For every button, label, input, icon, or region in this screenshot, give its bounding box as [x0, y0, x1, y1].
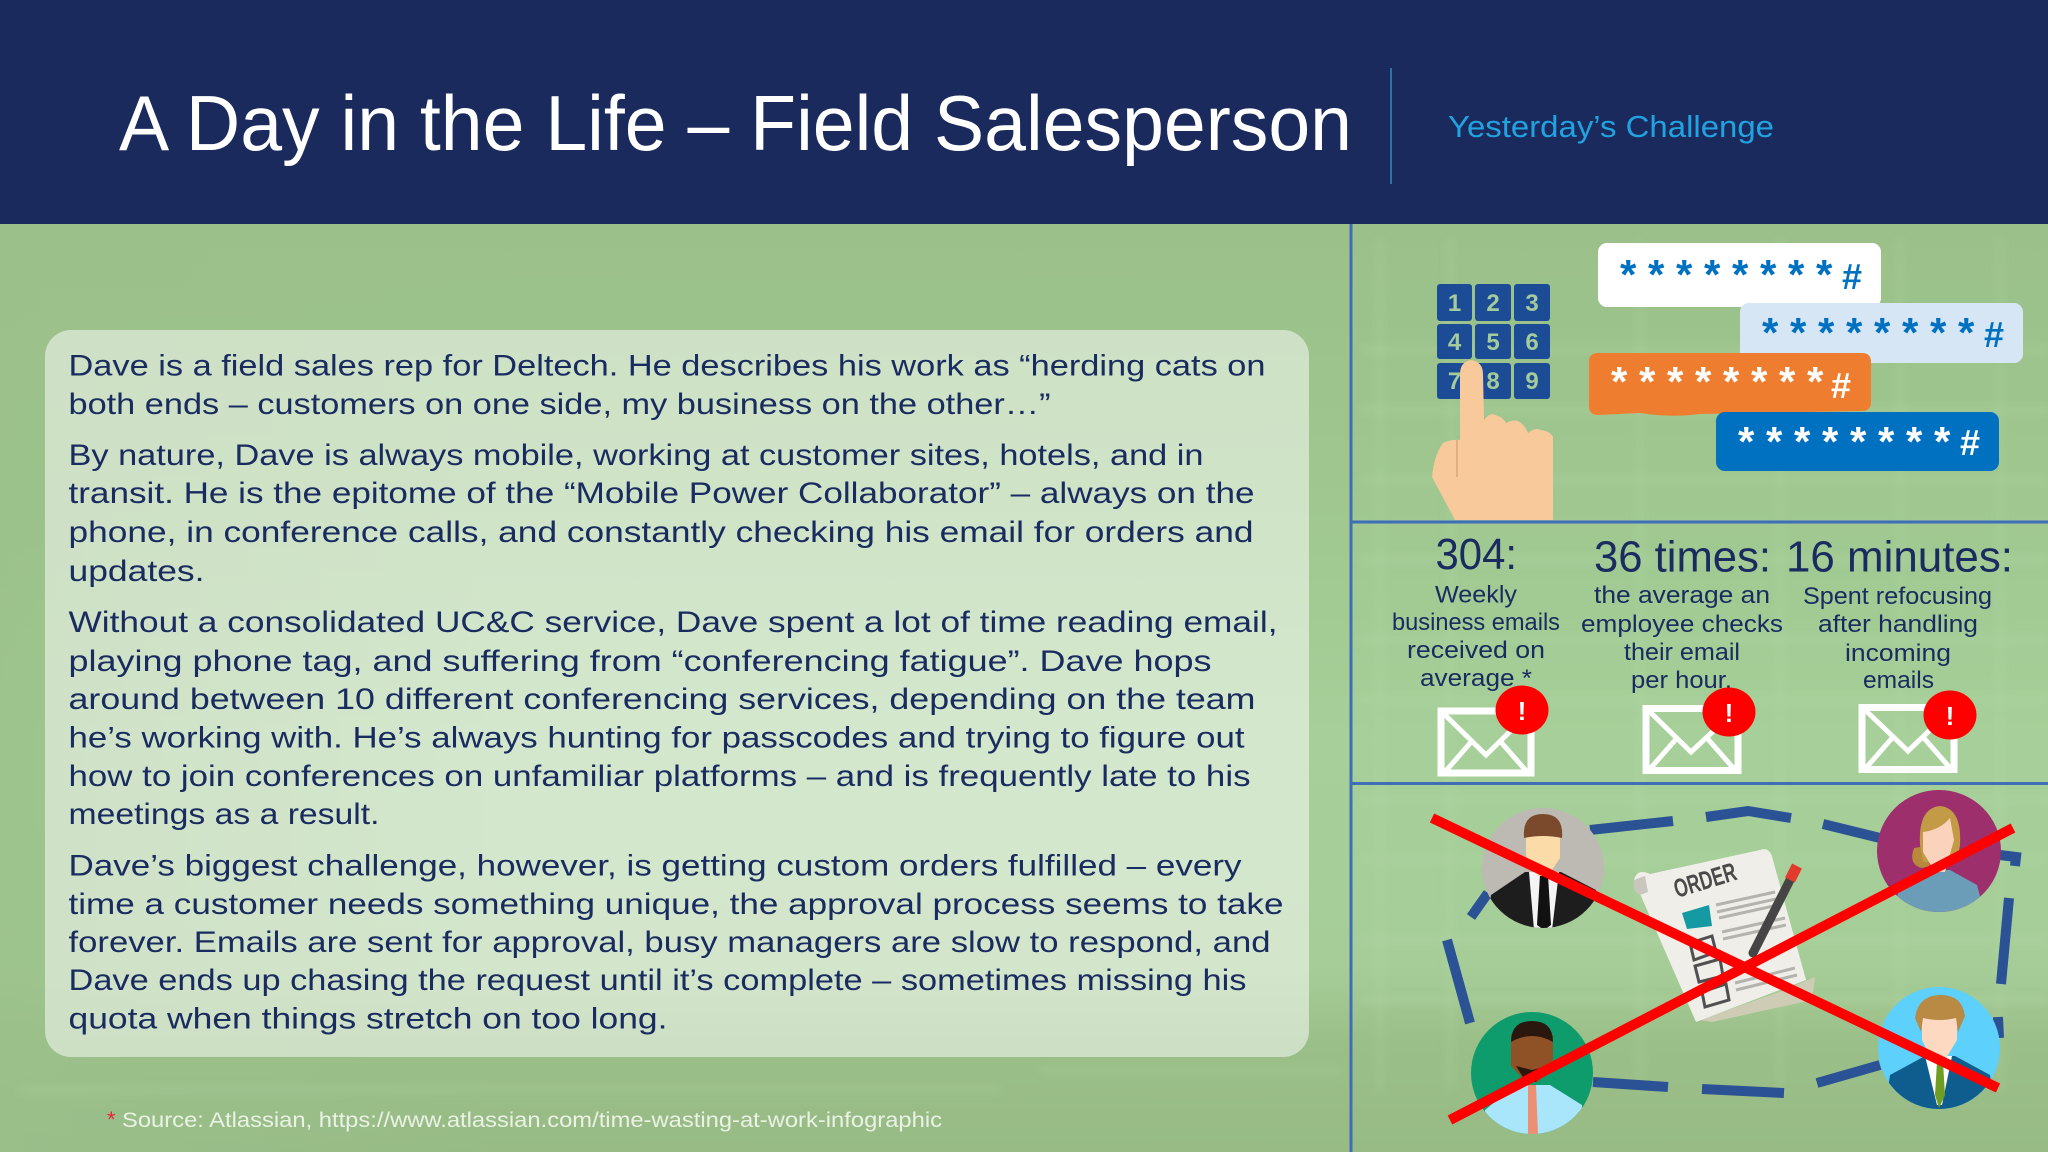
paragraph 4	[68, 850, 1284, 1036]
icon: envelope alert 3	[1862, 690, 1976, 770]
icon: envelope alert 1	[1441, 686, 1548, 773]
icon: envelope alert 2	[1646, 688, 1756, 770]
stat: 304 weekly emails: average *	[1420, 665, 1532, 692]
stat: 304 weekly emails	[1392, 530, 1560, 692]
title: A Day in the Life – Field Salesperson	[119, 79, 1352, 167]
paragraph 3: playing phone tag, and suffering from “conferencing fatigue”. Dave hops	[68, 645, 1212, 678]
paragraph 4: Dave’s biggest challenge, however, is getting custom orders fulfilled – every	[68, 850, 1242, 882]
stat: 16 minutes	[1786, 532, 2013, 694]
icon: envelope alert 1: !	[1518, 696, 1526, 726]
paragraph 2: transit. He is the epitome of the “Mobile Power Collaborator” – always on the	[68, 477, 1254, 510]
paragraph 3	[68, 606, 1278, 831]
paragraph 2	[68, 439, 1254, 588]
paragraph 2: updates.	[68, 555, 204, 588]
stat: 36 times: employee checks	[1581, 611, 1783, 638]
passcode bubble: orange: #	[1831, 365, 1851, 406]
header band	[0, 0, 2048, 224]
document title: ORDER	[1670, 856, 1740, 904]
paragraph 2: phone, in conference calls, and constantly checking his email for orders and	[68, 516, 1254, 549]
icon: keypad: 1	[1448, 290, 1461, 317]
passcode bubble: blue	[1716, 412, 1999, 471]
stat: 16 minutes: Spent refocusing	[1803, 583, 1992, 610]
paragraph 3: meetings as a result.	[68, 798, 380, 831]
icon: keypad: 9	[1525, 368, 1539, 395]
icon: keypad: 3	[1525, 290, 1539, 317]
passcode bubble: orange	[1589, 353, 1871, 416]
subtitle: Yesterday’s Challenge	[1448, 109, 1774, 144]
paragraph 3: around between 10 different conferencing services, depending on the team	[68, 683, 1256, 716]
stat: 304 weekly emails: 304:	[1436, 530, 1517, 579]
person: man in blue suit	[1878, 987, 2000, 1109]
dashed approval loop arrows	[1447, 811, 2016, 1093]
paragraph 2: By nature, Dave is always mobile, working at customer sites, hotels, and in	[68, 439, 1204, 472]
person: man in green circle	[1470, 1012, 1594, 1134]
header divider	[1390, 68, 1392, 184]
panel: story text	[45, 330, 1309, 1057]
icon: keypad: 4	[1448, 329, 1462, 356]
icon: hand pressing keypad	[1432, 360, 1553, 520]
stat: 36 times: the average an	[1594, 582, 1770, 609]
source footnote: Source: Atlassian, https://www.atlassian.com/time-wasting-at-work-infographic	[122, 1109, 942, 1132]
stat: 16 minutes: 16 minutes:	[1786, 532, 2013, 582]
icon: envelope alert 3: !	[1946, 701, 1954, 731]
paragraph 1: Dave is a field sales rep for Deltech. He describes his work as “herding cats on	[68, 350, 1266, 382]
icon: keypad: 5	[1486, 329, 1500, 356]
stat: 16 minutes: incoming	[1845, 640, 1951, 667]
stat: 304 weekly emails: Weekly	[1435, 582, 1517, 608]
stat: 16 minutes: emails	[1863, 667, 1934, 694]
stat: 36 times	[1581, 532, 1783, 694]
icon: envelope alert 2: !	[1725, 698, 1733, 728]
section dividers	[1351, 224, 2048, 1152]
stat: 304 weekly emails: business emails	[1392, 609, 1560, 636]
paragraph 4: quota when things stretch on too long.	[68, 1002, 668, 1036]
paragraph 3: he’s working with. He’s always hunting for passcodes and trying to figure out	[68, 722, 1245, 754]
passcode bubble: orange: ********	[1611, 358, 1824, 405]
icon: order document	[1634, 849, 1815, 1022]
passcode bubble: white: ********	[1620, 251, 1833, 298]
icon: keypad: 7	[1448, 368, 1461, 395]
passcode bubble: white: #	[1842, 256, 1862, 297]
stat: 36 times: per hour.	[1631, 667, 1732, 694]
paragraph 4: Dave ends up chasing the request until it’s complete – sometimes missing his	[68, 964, 1246, 997]
passcode bubble: light blue	[1740, 303, 2023, 363]
passcode bubble: light blue: ********	[1762, 309, 1975, 356]
paragraph 4: forever. Emails are sent for approval, busy managers are slow to respond, and	[68, 926, 1271, 959]
paragraph 3: Without a consolidated UC&C service, Dave spent a lot of time reading email,	[68, 606, 1278, 639]
stat: 36 times: their email	[1624, 639, 1740, 666]
stat: 304 weekly emails: received on	[1407, 637, 1545, 664]
icon: keypad: 6	[1525, 329, 1539, 356]
icon: keypad: 2	[1486, 290, 1500, 317]
stat: 36 times: 36 times:	[1594, 532, 1771, 582]
passcode bubble: blue: #	[1960, 422, 1980, 463]
passcode bubble: white	[1598, 243, 1881, 307]
person: man in black suit	[1480, 806, 1606, 930]
paragraph 3: how to join conferences on unfamiliar platforms – and is frequently late to his	[68, 760, 1250, 793]
icon: keypad	[1437, 284, 1550, 399]
source footnote: *	[107, 1107, 116, 1132]
passcode bubble: light blue: #	[1984, 314, 2004, 355]
stat: 16 minutes: after handling	[1818, 611, 1978, 638]
red cross-out	[1432, 818, 2013, 1120]
icon: keypad: 8	[1486, 368, 1500, 395]
paragraph 4: time a customer needs something unique, the approval process seems to take	[68, 888, 1284, 921]
paragraph 1	[68, 350, 1266, 421]
passcode bubble: blue: ********	[1738, 418, 1951, 465]
paragraph 1: both ends – customers on one side, my business on the other…”	[68, 388, 1050, 421]
person: woman in blue shirt	[1876, 789, 2002, 915]
